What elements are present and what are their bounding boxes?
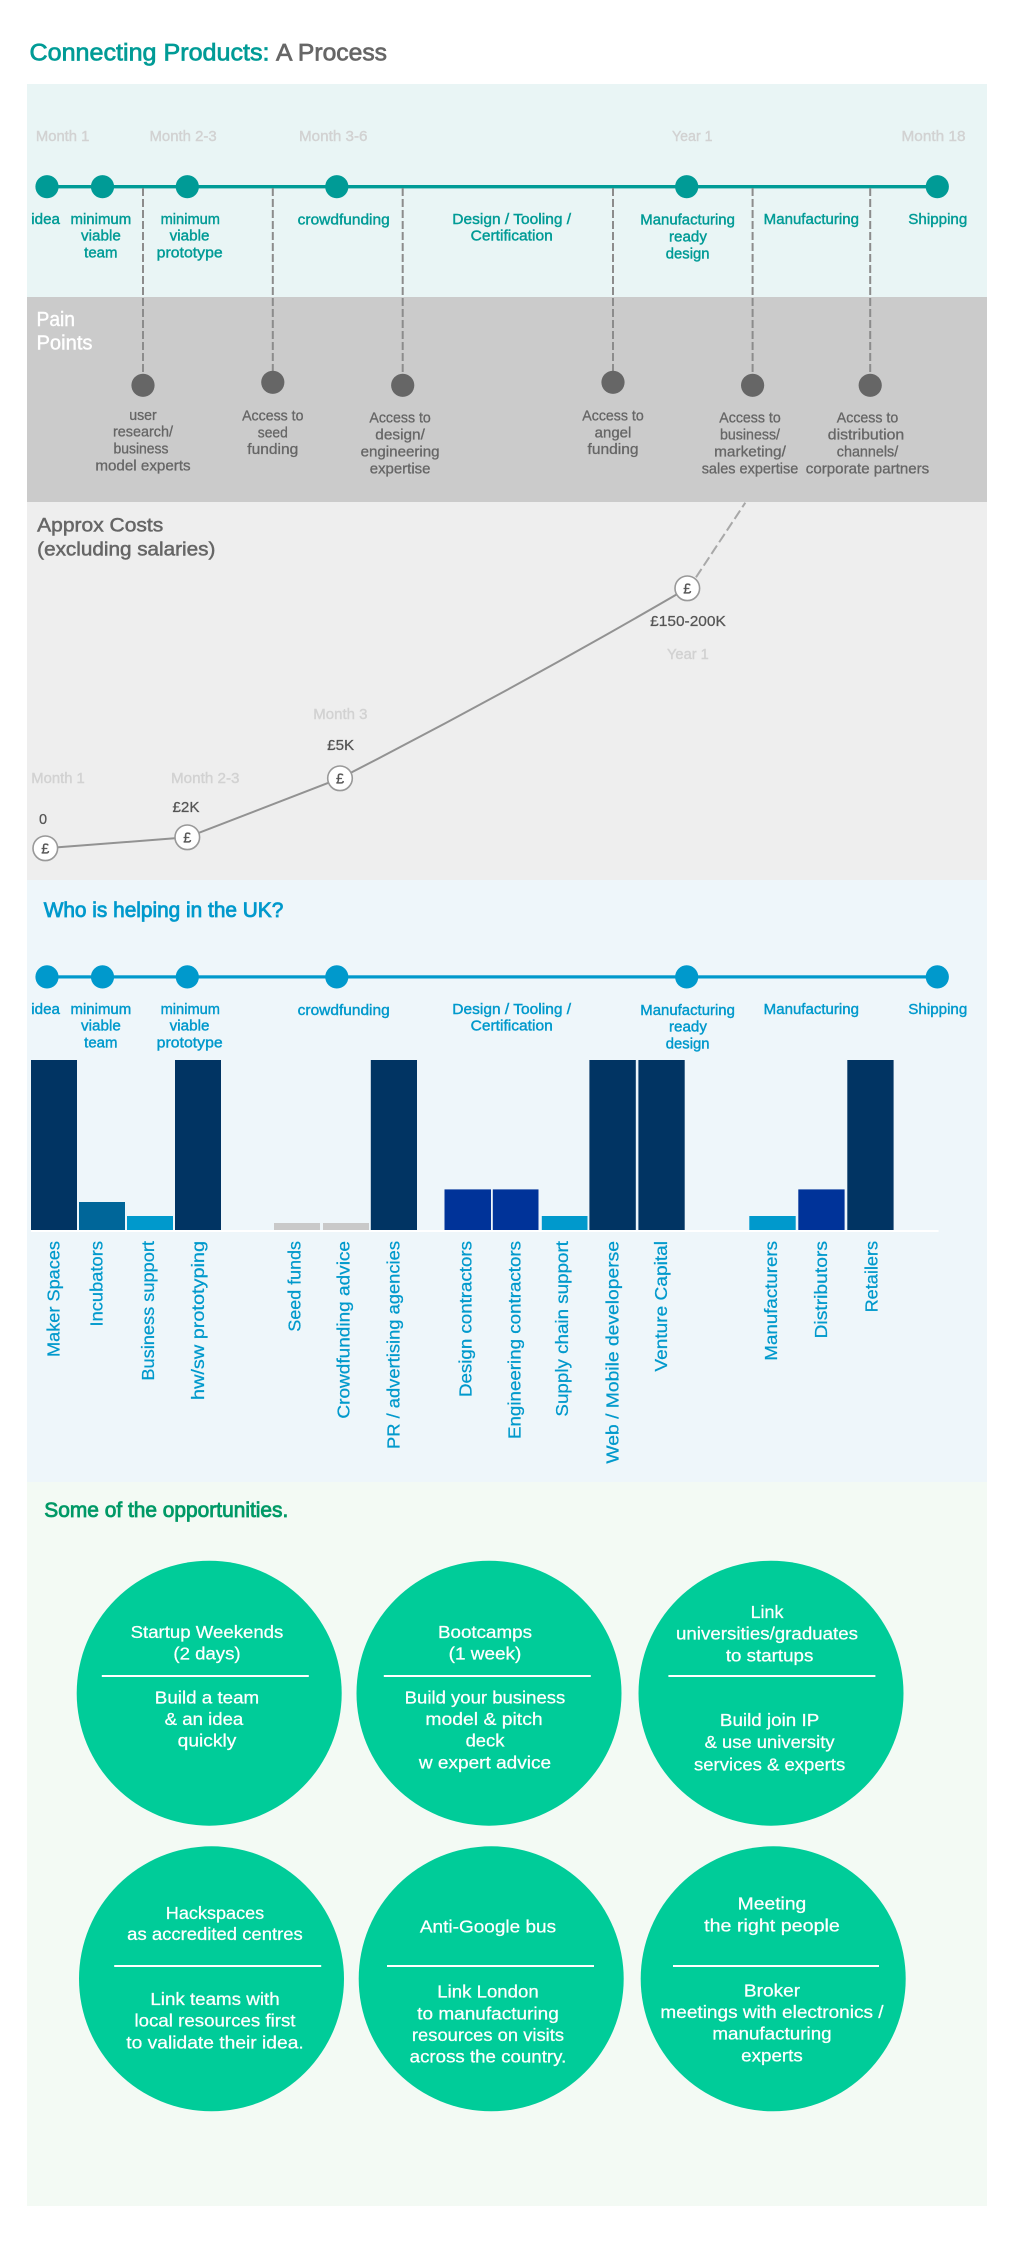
cost values: £2K	[172, 800, 200, 816]
panel: opportunities	[27, 1482, 987, 2206]
stage labels: ready	[669, 230, 708, 246]
cost line chart: £	[41, 841, 49, 857]
pain point: design expertise: Access to	[369, 411, 431, 427]
blue stage labels: minimum	[70, 1002, 131, 1018]
circle: universities	[638, 1561, 904, 1826]
pain point: distribution	[806, 411, 929, 477]
month labels	[36, 129, 965, 145]
blue stage labels: crowdfunding	[298, 1003, 390, 1019]
blue stage labels: minimum	[161, 1002, 220, 1018]
cost values: 0	[39, 812, 47, 828]
bar labels: Venture Capital	[651, 1241, 671, 1372]
circle: anti-google bus: across the country.	[410, 2046, 566, 2066]
pain point: experts	[95, 408, 191, 474]
blue stage labels: prototype	[157, 1036, 223, 1052]
pain point: experts: user	[129, 408, 157, 424]
pain point: seed funding: Access to	[242, 409, 303, 425]
circle: anti-google bus: Link London	[437, 1982, 539, 2002]
circle: bootcamps: Bootcamps	[438, 1622, 532, 1642]
circle: bootcamps	[356, 1561, 622, 1826]
cost values: £5K	[327, 738, 355, 754]
bar labels: hw/sw prototyping	[188, 1241, 208, 1400]
bar labels: Engineering contractors	[504, 1241, 524, 1439]
circle: meeting people: meetings with electronics /	[660, 2002, 884, 2022]
stage labels: Certification	[471, 228, 553, 244]
stage labels: viable	[81, 228, 121, 244]
bar labels: Seed funds	[284, 1241, 304, 1332]
pain point: sales expertise	[702, 411, 798, 477]
stage labels: prototype	[157, 245, 223, 261]
blue stage labels: Design / Tooling /	[452, 1002, 572, 1018]
bar labels: Web / Mobile developerse	[602, 1241, 622, 1464]
circle: anti-google bus: Anti-Google bus	[420, 1916, 556, 1936]
circle: universities: Build join IP	[720, 1710, 819, 1730]
stage labels: viable	[170, 228, 210, 244]
pain point: angel funding	[582, 409, 644, 458]
stage labels: Shipping	[908, 212, 967, 228]
bar labels	[44, 1241, 881, 1464]
circle: hackspaces: Link teams with	[150, 1989, 280, 2009]
month labels: Month 1	[36, 129, 89, 145]
blue stage labels: design	[666, 1036, 710, 1052]
circle: startup weekends: quickly	[178, 1730, 237, 1750]
blue timeline	[35, 965, 949, 989]
pain point: sales expertise: marketing/	[714, 444, 787, 460]
circle: anti-google bus: to manufacturing	[417, 2003, 559, 2023]
title	[30, 40, 387, 66]
stage labels: crowdfunding	[298, 213, 390, 229]
circle: universities: to startups	[726, 1646, 814, 1666]
timeline line with stage dots	[35, 175, 949, 198]
month labels: Month 2-3	[150, 129, 217, 145]
circle: universities: & use university	[705, 1732, 835, 1752]
pain point: design expertise	[361, 411, 440, 477]
cost time labels: Month 1	[31, 771, 85, 787]
circle: startup weekends: (2 days)	[173, 1644, 241, 1664]
pain point: experts: business	[114, 441, 168, 457]
blue stage labels: viable	[81, 1018, 121, 1034]
cost line chart: £	[683, 581, 691, 597]
pain point: seed funding: seed	[258, 425, 288, 441]
circle: bootcamps: model & pitch	[425, 1709, 543, 1729]
blue stage labels: Manufacturing	[640, 1003, 735, 1019]
circle: meeting people: the right people	[704, 1915, 840, 1935]
panel: who is helping	[27, 880, 987, 1482]
circle: meeting people: Meeting	[738, 1894, 806, 1914]
stage labels: Design / Tooling /	[452, 212, 572, 228]
bar chart	[31, 1060, 939, 1232]
pain point: angel funding: Access to	[582, 409, 644, 425]
circle: meeting people: Broker	[744, 1980, 800, 2000]
circle: meeting people: manufacturing	[712, 2024, 832, 2044]
bar labels: Retailers	[861, 1241, 881, 1312]
bar labels: Crowdfunding advice	[333, 1241, 353, 1419]
circle: hackspaces: Hackspaces	[166, 1903, 264, 1923]
circle: hackspaces: local resources first	[134, 2011, 296, 2031]
circle: anti-google bus	[359, 1846, 624, 2111]
circle: bootcamps: (1 week)	[449, 1644, 521, 1664]
blue stage labels: viable	[170, 1018, 210, 1034]
cost line chart: £	[183, 830, 191, 846]
stage labels: Manufacturing	[640, 213, 735, 229]
pain point: sales expertise: business/	[720, 427, 781, 443]
circle: bootcamps: w expert advice	[418, 1752, 551, 1772]
stage labels: design	[666, 246, 710, 262]
bar labels: Distributors	[811, 1241, 831, 1338]
month labels: Month 18	[902, 129, 966, 145]
cost time labels	[31, 647, 709, 787]
bar labels: PR / advertising agencies	[384, 1241, 404, 1449]
bar labels: Maker Spaces	[44, 1241, 64, 1357]
cost values	[39, 614, 726, 828]
cost time labels: Month 3	[313, 707, 368, 723]
circle: universities: Link	[751, 1602, 784, 1622]
who is helping heading: Who is helping in the UK?	[44, 899, 283, 922]
stage labels: Manufacturing	[764, 212, 859, 228]
blue stage labels: Certification	[471, 1018, 553, 1034]
cost time labels: Month 2-3	[171, 771, 240, 787]
costs heading: (excluding salaries)	[37, 540, 215, 560]
cost line chart	[33, 503, 745, 861]
circle: hackspaces	[79, 1846, 344, 2111]
blue stage labels: team	[84, 1036, 118, 1052]
pain point: angel funding: angel	[595, 425, 631, 441]
pain point: design expertise: engineering	[361, 444, 440, 460]
cost values: £150-200K	[650, 614, 726, 630]
bar labels: Incubators	[87, 1241, 107, 1327]
circle: universities: services & experts	[694, 1754, 845, 1774]
pain point: distribution: channels/	[837, 444, 899, 460]
title: A Process	[276, 40, 387, 66]
blue stage labels: Manufacturing	[764, 1002, 859, 1018]
circle: bootcamps: Build your business	[405, 1687, 566, 1707]
cost line chart: £	[336, 771, 344, 787]
pain point: design expertise: expertise	[370, 461, 430, 477]
pain point: experts: model experts	[95, 458, 191, 474]
blue stage labels: Shipping	[908, 1002, 967, 1018]
blue stage labels: idea	[31, 1002, 61, 1018]
bar labels: Supply chain support	[552, 1241, 572, 1417]
blue stage labels	[31, 1002, 967, 1052]
circle: startup weekends: Startup Weekends	[131, 1622, 284, 1642]
stage labels	[31, 212, 967, 262]
pain points heading: Pain	[36, 309, 75, 331]
opportunities heading: Some of the opportunities.	[44, 1499, 288, 1522]
circle: startup weekends	[77, 1561, 342, 1826]
stage labels: minimum	[161, 212, 220, 228]
circle: bootcamps: deck	[466, 1730, 505, 1750]
title: Connecting Products:	[30, 40, 270, 66]
circle: hackspaces: to validate their idea.	[126, 2032, 304, 2052]
panel: process timeline	[27, 84, 987, 297]
pain point: seed funding	[242, 409, 303, 458]
cost time labels: Year 1	[667, 647, 709, 663]
circle: meeting people: experts	[741, 2046, 803, 2066]
month labels: Month 3-6	[299, 129, 368, 145]
bar labels: Manufacturers	[761, 1241, 781, 1361]
blue stage labels: ready	[669, 1020, 708, 1036]
costs heading: Approx Costs	[37, 516, 163, 536]
circle: anti-google bus: resources on visits	[412, 2025, 564, 2045]
pain point: design expertise: design/	[375, 427, 426, 443]
pain point connectors and dots	[131, 188, 882, 397]
circle: hackspaces: as accredited centres	[127, 1924, 303, 1944]
bar labels: Design contractors	[455, 1241, 475, 1397]
pain point: angel funding: funding	[588, 442, 638, 458]
pain point: sales expertise: sales expertise	[702, 461, 798, 477]
pain point: distribution: corporate partners	[806, 461, 929, 477]
pain points heading	[36, 309, 92, 354]
circle: meeting people	[641, 1846, 906, 2111]
panel: approx costs	[27, 502, 987, 880]
bar labels: Business support	[138, 1241, 158, 1381]
month labels: Year 1	[672, 129, 712, 145]
pain point: experts: research/	[113, 425, 174, 441]
stage labels: team	[84, 245, 118, 261]
circle: startup weekends: Build a team	[155, 1687, 259, 1707]
pain point: distribution: distribution	[828, 427, 904, 443]
stage labels: idea	[31, 212, 61, 228]
circle: universities: universities/graduates	[676, 1624, 858, 1644]
pain points heading: Points	[36, 332, 92, 354]
panel: pain points	[27, 188, 987, 502]
circle: startup weekends: & an idea	[165, 1709, 244, 1729]
costs heading	[37, 516, 215, 560]
pain point: sales expertise: Access to	[719, 411, 781, 427]
pain point: distribution: Access to	[837, 411, 898, 427]
stage labels: minimum	[70, 212, 131, 228]
pain point: seed funding: funding	[247, 442, 298, 458]
